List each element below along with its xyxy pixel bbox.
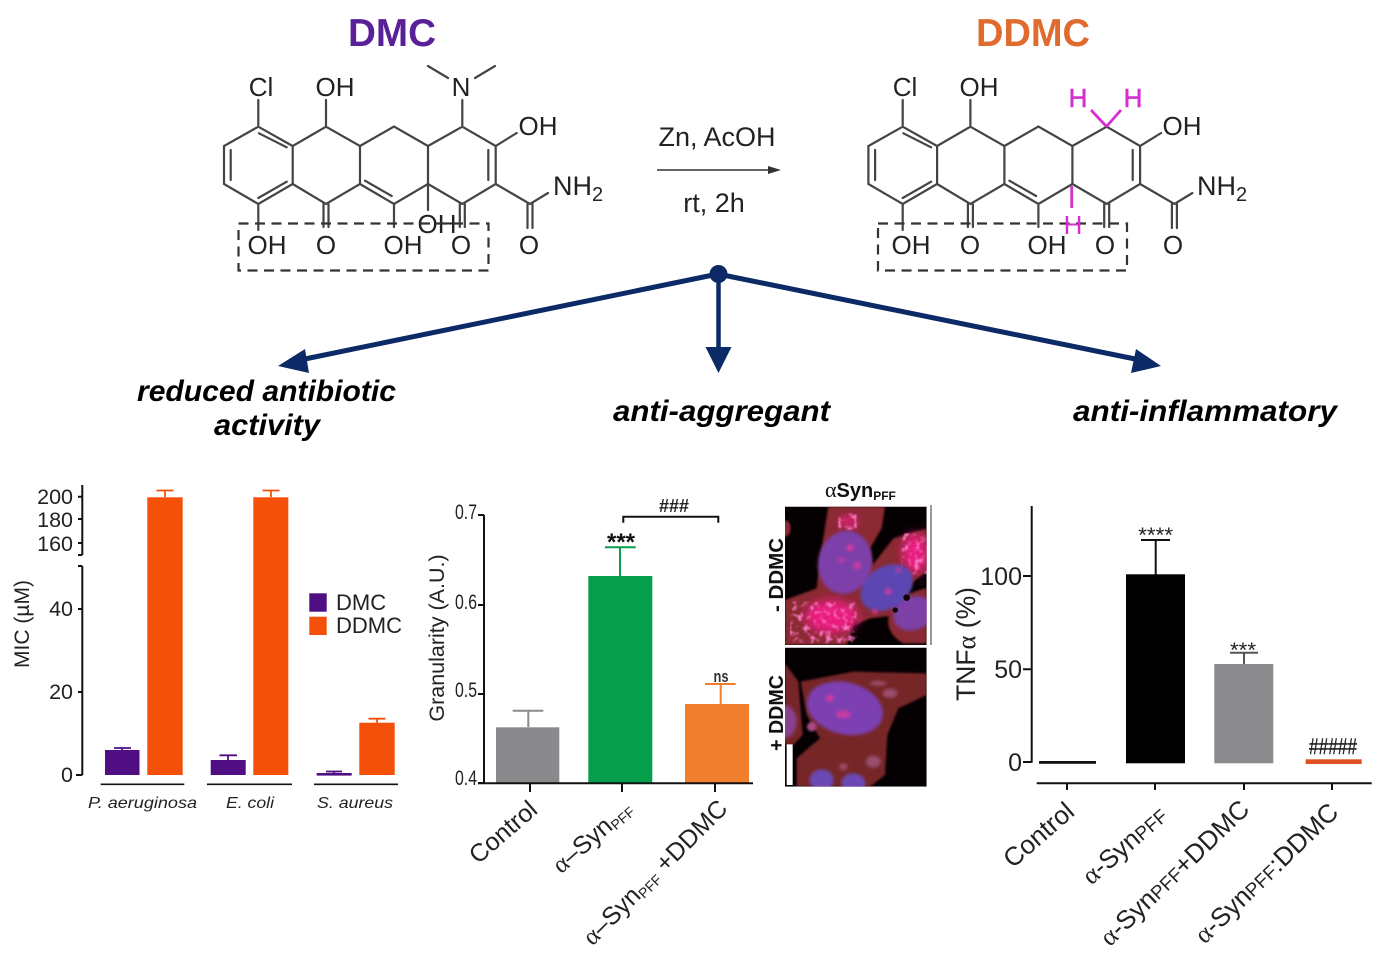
significance bracket: ### xyxy=(659,496,689,516)
significance bracket xyxy=(623,496,718,523)
dark vesicles xyxy=(893,580,925,613)
atom labels: Cl xyxy=(893,72,917,102)
bar: alpha-syn PFF : DDMC xyxy=(1306,734,1362,764)
cell bodies xyxy=(781,507,927,645)
nuclei xyxy=(816,529,927,633)
nucleoli xyxy=(826,694,851,718)
y axis: 20 xyxy=(49,680,73,704)
skeletal formula bonds xyxy=(224,66,548,230)
magenta hydrogens xyxy=(1064,83,1142,240)
scale bar xyxy=(787,744,793,785)
y axis: 0.7 xyxy=(455,501,477,524)
bar: alpha-syn PFF + DDMC: ns xyxy=(714,667,728,686)
category labels: Control xyxy=(464,795,543,869)
bar: alpha-syn PFF + DDMC: *** xyxy=(1230,639,1256,662)
atom labels: N xyxy=(452,72,470,102)
conditions: rt, 2h xyxy=(683,188,745,218)
arrow: to reduced antibiotic activity xyxy=(278,274,718,373)
bar: control xyxy=(1039,761,1096,764)
y axis: 50 xyxy=(994,656,1022,684)
effect label: reduced antibiotic activity: reduced antibiotic xyxy=(137,375,396,408)
arrow: to anti-inflammatory xyxy=(718,274,1161,373)
thin divider xyxy=(930,505,932,645)
x axis xyxy=(1037,783,1372,790)
bar chart: TNF alpha xyxy=(951,506,1372,952)
atom labels: O xyxy=(316,230,336,260)
y axis: 100 xyxy=(980,563,1022,591)
atom labels: OH xyxy=(316,72,354,102)
y axis: 180 xyxy=(37,508,73,532)
magenta hydrogens: H xyxy=(1069,83,1087,113)
atom labels: OH xyxy=(1028,230,1066,260)
effect label: reduced antibiotic activity xyxy=(137,375,396,442)
legend xyxy=(309,590,402,638)
bar: alpha-syn PFF: **** xyxy=(1138,524,1173,547)
bar: alpha-syn PFF xyxy=(1126,524,1185,763)
category labels: α-SynPFF+DDMC xyxy=(1093,794,1255,952)
y axis xyxy=(11,485,82,787)
atom labels: O xyxy=(1163,230,1183,260)
atom labels: Cl xyxy=(249,72,273,102)
atom labels: 2 xyxy=(592,184,603,206)
branching arrows to effects xyxy=(278,265,1161,373)
y axis: MIC (µM) xyxy=(11,580,34,668)
atom labels: NH xyxy=(1197,171,1236,201)
atom labels xyxy=(892,72,1247,260)
atom labels: OH xyxy=(518,111,558,141)
bar: control xyxy=(496,711,559,783)
speckle over pink regions xyxy=(790,513,927,643)
y axis: 200 xyxy=(37,485,73,509)
reagents: Zn, AcOH xyxy=(658,122,776,152)
atom labels: NH xyxy=(553,171,592,201)
atom labels: OH xyxy=(418,209,456,239)
atom labels: O xyxy=(1095,230,1115,260)
bar: alpha-syn PFF + DDMC xyxy=(1214,639,1273,763)
legend: DMC xyxy=(336,590,386,615)
group lines and species labels: E. coli xyxy=(226,795,274,812)
bars: P. aeruginosa xyxy=(105,490,183,775)
row label: minus DDMC: - DDMC xyxy=(766,538,788,612)
category labels: α–Syn xyxy=(578,881,646,951)
bright pink aggregates xyxy=(805,516,928,633)
y axis: 0 xyxy=(61,763,73,787)
y axis: TNFα (%) xyxy=(951,587,981,701)
y axis: 0.5 xyxy=(455,679,477,702)
dashed box: shared tricarbonyl region xyxy=(238,224,488,270)
bar: alpha-syn PFF + DDMC xyxy=(685,667,749,783)
bar: alpha-syn PFF: *** xyxy=(607,529,636,556)
group lines and species labels: P. aeruginosa xyxy=(88,795,197,812)
skeletal formula bonds xyxy=(868,100,1192,230)
atom labels: O xyxy=(519,230,539,260)
magenta hydrogens: H xyxy=(1124,83,1142,113)
junction dot xyxy=(710,265,728,283)
row label: plus DDMC: + DDMC xyxy=(766,675,788,751)
micrograph title: PFF xyxy=(873,489,896,503)
atom labels: OH xyxy=(248,230,286,260)
arrow xyxy=(657,166,781,174)
x axis xyxy=(478,783,753,792)
structure: DDMC xyxy=(868,12,1247,270)
category labels: +DDMC xyxy=(645,794,733,883)
nucleoli xyxy=(839,544,901,614)
arrow: to anti-aggregant xyxy=(706,274,732,373)
micrograph title: αSyn xyxy=(825,477,873,502)
bar: alpha-syn PFF xyxy=(588,529,652,783)
y axis xyxy=(425,501,484,790)
y axis: 0 xyxy=(1008,749,1022,777)
bar chart: granularity xyxy=(425,496,753,951)
group lines and species labels: S. aureus xyxy=(317,795,393,812)
legend: DDMC xyxy=(336,613,402,638)
atom labels: OH xyxy=(960,72,998,102)
category labels: PFF xyxy=(607,803,638,833)
micrograph panel: plus DDMC xyxy=(785,648,927,787)
title: DMC: DMC xyxy=(348,12,436,55)
category labels: Control xyxy=(997,796,1080,874)
micrographs: alpha-Syn PFF with and without DDMC xyxy=(766,477,939,793)
bar: alpha-syn PFF : DDMC: ##### xyxy=(1309,734,1358,759)
effect label: reduced antibiotic activity: activity xyxy=(214,409,321,442)
atom labels: OH xyxy=(892,230,930,260)
atom labels: O xyxy=(451,230,471,260)
y axis: 40 xyxy=(49,597,73,621)
category labels: α-SynPFF xyxy=(1076,800,1173,890)
category labels: α-SynPFF:DDMC xyxy=(1188,797,1344,949)
bars: S. aureus xyxy=(317,719,395,776)
dashed box: shared tricarbonyl region xyxy=(878,224,1127,270)
y axis: Granularity (A.U.) xyxy=(425,554,449,722)
faint puncta xyxy=(839,681,897,770)
category labels: PFF xyxy=(635,871,665,901)
y axis: 160 xyxy=(37,532,73,556)
group lines and species labels xyxy=(88,784,398,812)
atom labels: OH xyxy=(1162,111,1202,141)
title: DDMC: DDMC xyxy=(976,12,1090,55)
structure: DMC xyxy=(224,12,603,270)
category labels: α–Syn xyxy=(547,812,618,879)
reaction arrow with conditions xyxy=(657,122,781,218)
y axis xyxy=(951,506,1032,777)
y axis: 0.6 xyxy=(455,591,477,614)
bar chart: MIC xyxy=(11,485,402,812)
atom labels xyxy=(248,72,603,260)
nuclei xyxy=(785,679,886,787)
effect label: anti-inflammatory: anti-inflammatory xyxy=(1073,395,1338,428)
category labels xyxy=(997,794,1344,952)
category labels xyxy=(464,794,733,951)
bars: E. coli xyxy=(211,490,288,775)
cell bodies xyxy=(785,663,927,787)
magenta hydrogens: H xyxy=(1064,210,1082,240)
atom labels: 2 xyxy=(1236,184,1247,206)
y axis: 0.4 xyxy=(455,767,477,790)
micrograph panel: minus DDMC xyxy=(781,507,939,645)
atom labels: O xyxy=(960,230,980,260)
atom labels: OH xyxy=(384,230,422,260)
effect label: anti-aggregant: anti-aggregant xyxy=(613,395,832,428)
